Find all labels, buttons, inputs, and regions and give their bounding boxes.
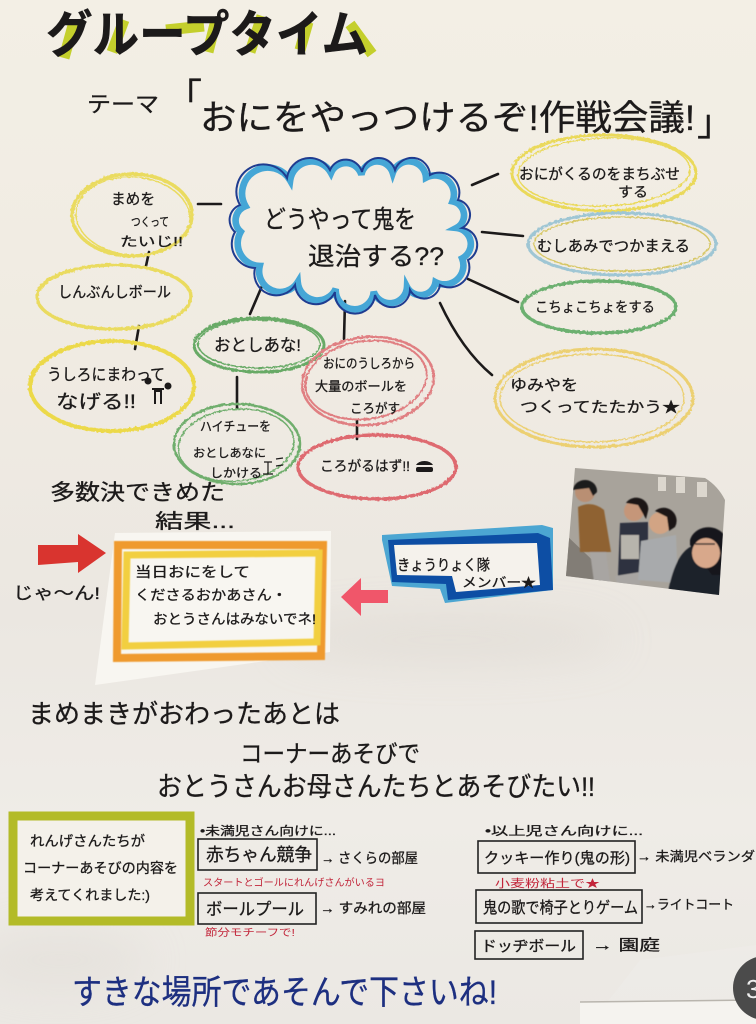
over-3 corner list: 小麦粉粘土で★ xyxy=(495,876,600,890)
under-3 corner list: → さくらの部屋 xyxy=(321,850,418,866)
under-3 corner list: → すみれの部屋 xyxy=(320,900,426,916)
under-3 corner list: スタートとゴールにれんげさんがいるヨ xyxy=(203,876,385,889)
crayon bubble: bow and arrow xyxy=(495,349,693,447)
crayon bubble: throw from behind: うしろにまわって xyxy=(47,366,165,384)
theme heading: 「 xyxy=(166,76,202,117)
box: cookie making xyxy=(478,841,635,873)
crayon bubble: should roll xyxy=(298,435,456,499)
crayon bubble: roll balls from behind xyxy=(298,331,438,431)
box: baby race: 赤ちゃん競争 xyxy=(206,845,312,865)
majority heading xyxy=(50,480,235,533)
crayon bubble: roll balls from behind: おにのうしろから xyxy=(323,356,415,371)
crayon bubble: should roll: ころがるはず!! xyxy=(320,458,410,474)
title: group time: グループタイム xyxy=(46,7,368,63)
crayon bubble: beans xyxy=(72,173,193,259)
paper fold corner xyxy=(580,945,756,1024)
pink arrow xyxy=(341,578,388,616)
blue members box xyxy=(382,525,553,603)
crayon bubble: ambush: する xyxy=(618,184,648,200)
crayon bubble: beans: つくって xyxy=(131,215,169,229)
message headline: おとうさんお母さんたちとあそびたい!! xyxy=(157,772,595,802)
cloud: how to defeat the oni xyxy=(230,158,477,314)
scroll button xyxy=(733,956,756,1020)
box: musical chairs: 鬼の歌で椅子とりゲーム xyxy=(483,899,638,917)
crayon bubble: tickle xyxy=(522,281,676,333)
lime green box xyxy=(13,816,190,921)
theme heading: 」 xyxy=(697,102,733,143)
crayon bubble: beans: たいじ!! xyxy=(120,234,183,249)
red arrow xyxy=(38,534,106,573)
crayon bubble: bug net: むしあみでつかまえる xyxy=(537,238,690,255)
theme heading xyxy=(87,76,733,143)
message headline xyxy=(28,699,595,802)
under-3 corner list: 節分モチーフで! xyxy=(205,926,295,939)
crayon bubble: hi-chew: おとしあなに xyxy=(193,446,266,460)
over-3 corner list: •以上児さん向けに... xyxy=(485,823,643,838)
crayon bubble: hi-chew: しかける xyxy=(210,466,262,480)
cloud: how to defeat the oni: 退治する?? xyxy=(308,243,444,271)
majority heading: 多数決できめた xyxy=(50,480,225,505)
blue members box: メンバー★ xyxy=(462,575,536,590)
theme heading: おにをやっつけるぞ!作戦会議! xyxy=(200,99,695,138)
crayon bubble: newspaper ball xyxy=(37,265,191,329)
crayon bubble: bug net xyxy=(528,213,716,275)
crayon bubble: throw from behind xyxy=(30,341,194,431)
result note xyxy=(95,531,331,685)
crayon bubble: bow and arrow: ゆみやを xyxy=(510,377,578,394)
cloud: how to defeat the oni: どうやって鬼を xyxy=(264,206,416,234)
lime green box: コーナーあそびの内容を xyxy=(23,860,178,876)
under-3 corner list: •未満児さん向けに... xyxy=(200,823,336,838)
message headline: コーナーあそびで xyxy=(240,741,420,768)
crayon bubble: tickle: こちょこちょをする xyxy=(535,299,655,315)
lime green box: れんげさんたちが xyxy=(30,833,145,849)
crayon bubble: beans: まめを xyxy=(111,191,155,208)
crayon bubble: hi-chew: ハイチューを xyxy=(200,419,271,434)
crayon bubble: pitfall xyxy=(194,318,324,372)
majority heading: 結果... xyxy=(155,510,235,533)
ja-n label: じゃ〜ん! xyxy=(13,584,100,603)
crayon bubble: roll balls from behind: ころがす xyxy=(350,401,400,416)
paper shadows xyxy=(0,618,620,990)
over-3 corner list: →ライトコート xyxy=(644,897,734,912)
crayon bubble: bow and arrow: つくってたたかう★ xyxy=(520,399,680,416)
box: baby race xyxy=(198,839,317,870)
crayon bubble: ambush: おにがくるのをまちぶせ xyxy=(519,166,680,183)
photo of four children xyxy=(566,468,725,595)
over-3 corner list: → 園庭 xyxy=(592,937,660,954)
theme heading: テーマ xyxy=(87,92,159,117)
crayon bubble: ambush xyxy=(512,135,696,211)
over-3 corner list xyxy=(475,823,755,959)
connector lines xyxy=(135,174,523,439)
crayon bubble: newspaper ball: しんぶんしボール xyxy=(58,284,171,301)
box: ball pool xyxy=(198,893,316,924)
over-3 corner list: → 未満児ベランダ xyxy=(637,849,755,864)
message headline: まめまきがおわったあとは xyxy=(28,699,340,729)
lime green box: 考えてくれました:) xyxy=(30,887,150,903)
box: musical chairs xyxy=(476,890,642,923)
box: ball pool: ボールプール xyxy=(206,900,304,919)
crayon bubble: hi-chew xyxy=(174,404,300,486)
result note: 当日おにをして xyxy=(135,564,250,580)
closing message: すきな場所であそんで下さいね! xyxy=(72,974,497,1012)
crayon bubble: throw from behind: なげる!! xyxy=(56,391,136,413)
crayon bubble: roll balls from behind: 大量のボールを xyxy=(315,379,407,394)
box: cookie making: クッキー作り(鬼の形) xyxy=(484,850,630,867)
crayon bubble: pitfall: おとしあな! xyxy=(214,336,301,355)
blue members box: きょうりょく隊 xyxy=(397,557,490,574)
box: dodgeball: ドッヂボール xyxy=(481,938,576,955)
under-3 corner list xyxy=(198,823,426,939)
result note: くださるおかあさん・ xyxy=(135,587,287,603)
box: dodgeball xyxy=(475,931,583,959)
result note: おとうさんはみないでネ! xyxy=(153,611,316,627)
